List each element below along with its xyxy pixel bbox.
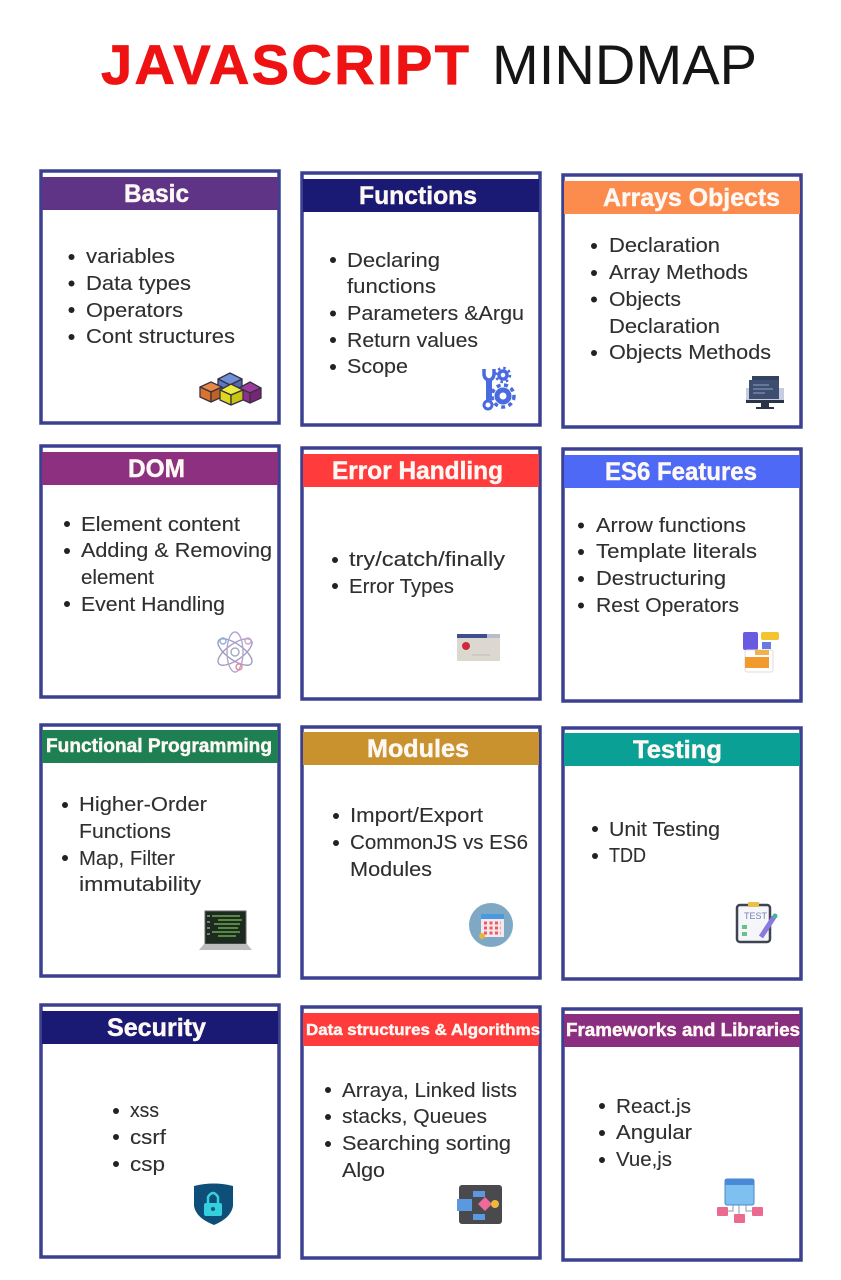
list: Testing topics bbox=[592, 818, 720, 867]
icon: test clipboard: TEST bbox=[744, 911, 768, 921]
list: Functional Programming topics bbox=[62, 793, 207, 896]
list: Functions topics bbox=[330, 249, 524, 378]
heading: Basic bbox=[42, 177, 278, 210]
list: Basic topics: Operators bbox=[86, 299, 183, 322]
panel: Testing bbox=[563, 728, 801, 979]
list: Data structures topics: stacks, Queues bbox=[342, 1105, 487, 1128]
list: Testing topics: TDD bbox=[609, 844, 646, 867]
icon: algorithm flowchart bbox=[457, 1185, 502, 1224]
heading: Data structures and Algorithms: Data structures & Algorithms bbox=[306, 1022, 540, 1039]
heading: Arrays Objects bbox=[564, 181, 800, 214]
heading: Functional Programming: Functional Programming bbox=[46, 736, 272, 757]
panel: Functions bbox=[302, 173, 540, 425]
list: DOM topics: Event Handling bbox=[81, 593, 225, 616]
icon: error dialog bbox=[457, 634, 500, 661]
list: Arrays Objects topics: Objects bbox=[609, 288, 681, 311]
title: JAVASCRIPT bbox=[101, 33, 469, 96]
list: Error Handling topics bbox=[332, 548, 506, 598]
icon: code monitor bbox=[746, 376, 784, 409]
list: Functional Programming topics: immutability bbox=[79, 873, 202, 896]
title: MINDMAP bbox=[492, 33, 757, 96]
list: DOM topics: element bbox=[81, 566, 154, 589]
list: Basic topics: Cont structures bbox=[86, 325, 235, 348]
list: DOM topics: Adding & Removing bbox=[81, 539, 272, 562]
panel: Basic bbox=[41, 171, 279, 423]
icon: wrench and gears bbox=[484, 368, 514, 409]
list: Functional Programming topics: Functions bbox=[79, 820, 171, 843]
list: Security topics bbox=[113, 1099, 166, 1176]
heading: DOM bbox=[42, 452, 278, 485]
list: ES6 topics: Rest Operators bbox=[596, 594, 739, 617]
list: Error Handling topics: Error Types bbox=[349, 575, 454, 598]
list: ES6 topics: Arrow functions bbox=[596, 514, 746, 537]
icon: test clipboard bbox=[737, 902, 778, 942]
list: DOM topics bbox=[64, 513, 272, 616]
list: Frameworks topics: React.js bbox=[616, 1095, 691, 1118]
list: Functions topics: functions bbox=[347, 275, 436, 298]
heading: DOM: DOM bbox=[128, 455, 185, 483]
panel: Security bbox=[41, 1005, 279, 1257]
icon: atom bbox=[214, 632, 256, 672]
heading: Arrays Objects: Arrays Objects bbox=[603, 184, 780, 212]
heading: Data structures and Algorithms bbox=[303, 1013, 540, 1046]
list: Frameworks topics: Vue,js bbox=[616, 1148, 672, 1171]
list: Data structures topics bbox=[325, 1079, 517, 1182]
panel: Modules bbox=[302, 727, 540, 978]
list: Functions topics: Declaring bbox=[347, 249, 440, 272]
list: Security topics: csp bbox=[130, 1153, 165, 1176]
list: Modules topics: CommonJS vs ES6 bbox=[350, 831, 528, 854]
list: Error Handling topics: try/catch/finally bbox=[349, 548, 506, 571]
list: Data structures topics: Searching sorting bbox=[342, 1132, 511, 1155]
list: Frameworks topics: Angular bbox=[616, 1121, 692, 1144]
list: Security topics: csrf bbox=[130, 1126, 166, 1149]
icon: laptop with code bbox=[199, 911, 252, 950]
icon: coloured cubes bbox=[200, 373, 261, 405]
panel: ES6 Features bbox=[563, 449, 801, 701]
list: Functions topics: Scope bbox=[347, 355, 408, 378]
panel: Functional Programming bbox=[41, 725, 279, 976]
heading: ES6 Features bbox=[564, 455, 800, 488]
list: Data structures topics: Arraya, Linked lists bbox=[342, 1079, 517, 1102]
list: Modules topics bbox=[333, 804, 528, 881]
panel: Arrays Objects bbox=[563, 175, 801, 427]
heading: ES6 Features: ES6 Features bbox=[605, 458, 757, 486]
list: Functional Programming topics: Higher-Order bbox=[79, 793, 207, 816]
title bbox=[101, 33, 757, 96]
heading: Modules bbox=[303, 732, 539, 765]
list: Testing topics: Unit Testing bbox=[609, 818, 720, 841]
heading: Testing: Testing bbox=[633, 736, 722, 764]
list: Basic topics bbox=[68, 245, 235, 348]
list: Functions topics: Return values bbox=[347, 329, 478, 352]
list: Basic topics: Data types bbox=[86, 272, 191, 295]
icon: calendar in circle bbox=[469, 903, 513, 947]
list: Frameworks topics bbox=[599, 1095, 692, 1171]
list: Arrays Objects topics: Declaration bbox=[609, 315, 720, 338]
heading: Functional Programming bbox=[42, 730, 278, 763]
heading: Testing bbox=[564, 733, 800, 766]
list: Basic topics: variables bbox=[86, 245, 175, 268]
list: ES6 topics: Destructuring bbox=[596, 567, 726, 590]
icon: mobile app bbox=[743, 632, 779, 672]
list: Modules topics: Import/Export bbox=[350, 804, 483, 827]
list: Modules topics: Modules bbox=[350, 858, 432, 881]
panel: Frameworks and Libraries bbox=[563, 1009, 801, 1260]
list: ES6 topics bbox=[578, 514, 757, 617]
heading: Error Handling bbox=[303, 454, 539, 487]
panel: Data structures and Algorithms bbox=[302, 1007, 540, 1258]
list: Functions topics: Parameters &Argu bbox=[347, 302, 524, 325]
list: DOM topics: Element content bbox=[81, 513, 240, 536]
list: Arrays Objects topics: Declaration bbox=[609, 234, 720, 257]
heading: Basic: Basic bbox=[124, 180, 189, 208]
heading: Security bbox=[42, 1011, 278, 1044]
list: Arrays Objects topics: Array Methods bbox=[609, 261, 748, 284]
heading: Frameworks and Libraries: Frameworks and Libraries bbox=[566, 1020, 800, 1040]
heading: Functions: Functions bbox=[359, 182, 477, 210]
panel: Error Handling bbox=[302, 448, 540, 699]
list: Arrays Objects topics: Objects Methods bbox=[609, 341, 771, 364]
panel: DOM bbox=[41, 446, 279, 697]
heading: Security: Security bbox=[107, 1014, 206, 1042]
list: ES6 topics: Template literals bbox=[596, 540, 757, 563]
list: Data structures topics: Algo bbox=[342, 1159, 385, 1182]
icon: security shield bbox=[194, 1184, 233, 1225]
heading: Frameworks and Libraries bbox=[564, 1014, 800, 1047]
icon: framework network bbox=[717, 1179, 763, 1223]
heading: Error Handling: Error Handling bbox=[332, 457, 503, 485]
list: Security topics: xss bbox=[130, 1099, 159, 1122]
list: Arrays Objects topics bbox=[591, 234, 771, 364]
heading: Modules: Modules bbox=[367, 735, 469, 763]
list: Functional Programming topics: Map, Filter bbox=[79, 847, 175, 870]
heading: Functions bbox=[303, 179, 539, 212]
